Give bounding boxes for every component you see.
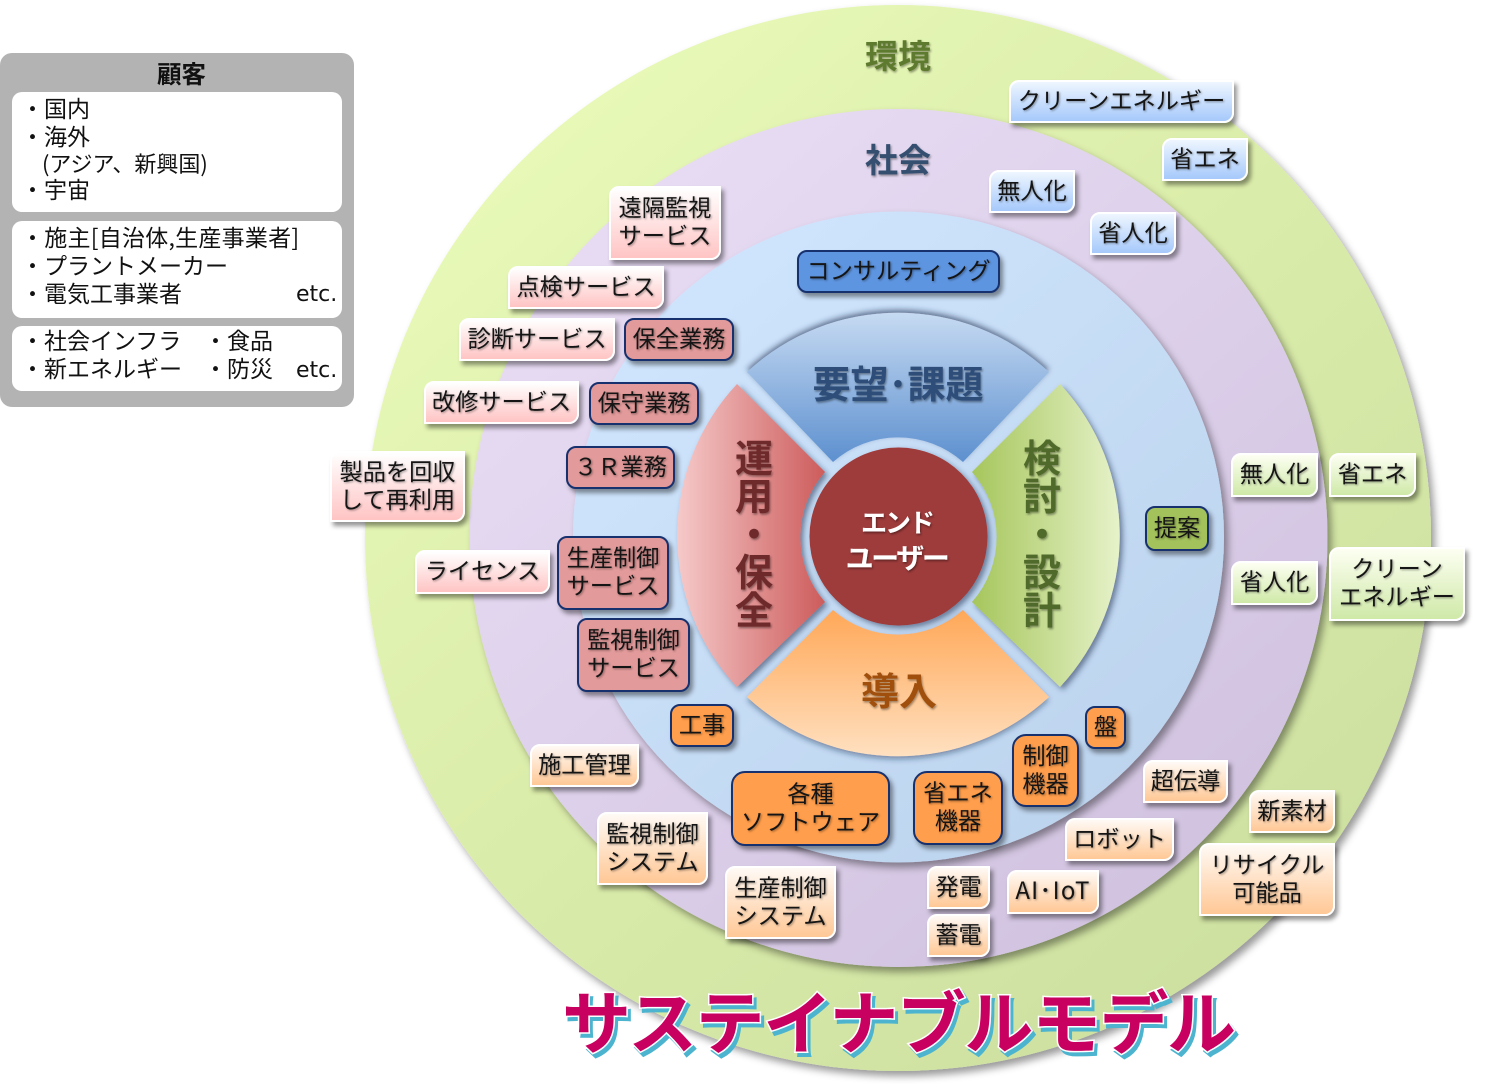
- tag: construction management: [530, 744, 639, 787]
- tag: monitoring control service: サービス: [587, 649, 680, 683]
- customer item: owner: ・施主[自治体,生産事業者]: [21, 219, 299, 253]
- tag: labor saving: 省人化: [1098, 214, 1168, 248]
- customer item: electrician: ・電気工事業者: [21, 275, 182, 309]
- tag: new materials: 新素材: [1257, 792, 1327, 826]
- tag: recyclable products: 可能品: [1232, 874, 1302, 908]
- ring: environment: [365, 5, 1431, 1071]
- tag: energy saving equipment: 省エネ: [923, 774, 993, 808]
- tag: various software: ソフトウェア: [741, 802, 880, 836]
- label: introduction: 導入: [861, 672, 937, 714]
- tag: unmanned, study: [1231, 453, 1318, 497]
- tag: construction: 工事: [679, 706, 725, 740]
- tag: monitoring control system: システム: [606, 842, 699, 876]
- tag: energy saving: 省エネ: [1170, 140, 1240, 174]
- tag: labor saving, study: [1231, 561, 1318, 605]
- tag: recover and reuse: 製品を回収: [340, 452, 455, 486]
- tag: clean energy, study: クリーン: [1351, 550, 1443, 584]
- tag: remote monitoring service: [609, 186, 721, 260]
- tag: proposal: [1145, 506, 1209, 551]
- ring: society: [470, 109, 1328, 967]
- tag: unmanned: [989, 170, 1075, 213]
- tag: control equipment: 制御: [1022, 736, 1069, 770]
- tag: proposal: 提案: [1154, 508, 1200, 542]
- tag: power storage: 蓄電: [935, 916, 982, 950]
- tag: upkeep work: 保守業務: [598, 384, 690, 418]
- customers box 1: [12, 92, 342, 212]
- customer item: food: ・食品: [204, 322, 273, 356]
- tag: 3R work: [566, 446, 675, 489]
- tag: monitoring control service: [577, 618, 690, 692]
- tag: energy saving, study: 省エネ: [1338, 455, 1407, 489]
- tag: 3R work: ３Ｒ業務: [574, 448, 667, 482]
- tag: energy saving: [1162, 138, 1248, 181]
- customer item: asia and emerging: (アジア、新興国): [42, 147, 208, 179]
- tag: robot: [1065, 818, 1174, 861]
- center: end user: [810, 448, 988, 626]
- customer item: disaster prevention: ・防災: [204, 350, 273, 384]
- customer item: domestic: ・国内: [21, 90, 90, 124]
- tag: various software: [731, 771, 890, 846]
- tag: unmanned, study: 無人化: [1240, 455, 1309, 489]
- label: requests and issues: 要望･課題: [812, 365, 984, 407]
- label: end user: エンド: [861, 508, 933, 538]
- tag: production control system: システム: [734, 896, 827, 930]
- tag: monitoring control system: 監視制御: [606, 814, 699, 848]
- tag: license: [415, 550, 550, 594]
- tag: remote monitoring service: 遠隔監視: [619, 189, 711, 223]
- tag: upkeep work: [589, 382, 699, 425]
- tag: energy saving, study: [1329, 453, 1416, 497]
- sector: operation and maintenance: [677, 384, 825, 687]
- tag: robot: ロボット: [1073, 820, 1166, 854]
- tag: panel: 盤: [1094, 708, 1117, 742]
- tag: clean energy, study: [1329, 547, 1465, 621]
- tag: maintenance work: 保全業務: [633, 320, 725, 354]
- customer item: new energy: ・新エネルギー: [21, 350, 182, 384]
- heading: customers: 顧客: [157, 56, 206, 91]
- sector: requests and issues: [747, 313, 1049, 462]
- customers box 2: [12, 221, 342, 318]
- customer item: plant maker: ・プラントメーカー: [21, 247, 228, 281]
- tag: diagnosis service: 診断サービス: [467, 320, 607, 354]
- tag: consulting: コンサルティング: [806, 252, 991, 286]
- tag: power generation: [927, 866, 990, 909]
- tag: recyclable products: リサイクル: [1210, 846, 1324, 880]
- tag: renovation service: 改修サービス: [432, 382, 571, 416]
- center: end user: ユーザー: [846, 543, 948, 574]
- tag: remote monitoring service: サービス: [619, 217, 711, 251]
- tag: license: ライセンス: [425, 552, 540, 586]
- tag: various software: 各種: [787, 774, 834, 808]
- tag: control equipment: [1012, 734, 1079, 807]
- tag: labor saving, study: 省人化: [1240, 563, 1309, 597]
- customer item: infrastructure: ・社会インフラ: [21, 322, 181, 356]
- tag: panel: [1085, 706, 1126, 749]
- sector: study and design: [972, 384, 1120, 687]
- sector: introduction: [747, 610, 1049, 756]
- tag: clean energy: クリーンエネルギー: [1018, 82, 1225, 116]
- tag: new materials: [1249, 790, 1335, 833]
- customer item: space: ・宇宙: [21, 171, 90, 205]
- tag: energy saving equipment: [913, 771, 1003, 845]
- panel: customers: [0, 53, 354, 407]
- tag: construction: [670, 704, 734, 747]
- tag: unmanned: 無人化: [997, 172, 1067, 206]
- label: operation and maintenance: 運用・保全: [735, 439, 773, 633]
- tag: AI and IoT: AI･IoT: [1015, 871, 1091, 906]
- tag: production control system: [725, 866, 836, 939]
- tag: superconductivity: 超伝導: [1151, 762, 1220, 796]
- tag: production control system: 生産制御: [734, 868, 827, 902]
- tag: superconductivity: [1143, 760, 1228, 803]
- tag: control equipment: 機器: [1022, 764, 1069, 798]
- tag: inspection service: 点検サービス: [516, 268, 656, 302]
- tag: monitoring control service: 監視制御: [587, 621, 680, 655]
- etc label: etc.: [296, 282, 337, 307]
- customers box 3: [12, 326, 342, 391]
- tag: power generation: 発電: [935, 868, 982, 902]
- tag: maintenance work: [624, 318, 734, 361]
- tag: recyclable products: [1199, 843, 1335, 916]
- tag: monitoring control system: [597, 812, 708, 885]
- customer item: overseas: ・海外: [21, 118, 90, 152]
- ring: business: [573, 212, 1224, 862]
- main title: サステイナブルモデル: [562, 986, 1236, 1063]
- heading: environment: 環境: [865, 38, 931, 75]
- tag: recover and reuse: して再利用: [340, 480, 455, 514]
- tag: labor saving: [1090, 212, 1176, 255]
- tag: production control service: 生産制御: [567, 539, 659, 573]
- heading: society: 社会: [865, 142, 931, 179]
- tag: energy saving equipment: 機器: [935, 802, 981, 836]
- etc label: etc.: [296, 358, 337, 383]
- tag: construction management: 施工管理: [538, 746, 631, 780]
- tag: production control service: サービス: [567, 567, 659, 601]
- tag: AI and IoT: [1007, 870, 1099, 914]
- tag: clean energy, study: エネルギー: [1339, 578, 1455, 612]
- tag: production control service: [557, 536, 669, 610]
- tag: power storage: [927, 914, 990, 957]
- tag: recover and reuse: [330, 451, 465, 522]
- label: study and design: 検討・設計: [1023, 439, 1061, 633]
